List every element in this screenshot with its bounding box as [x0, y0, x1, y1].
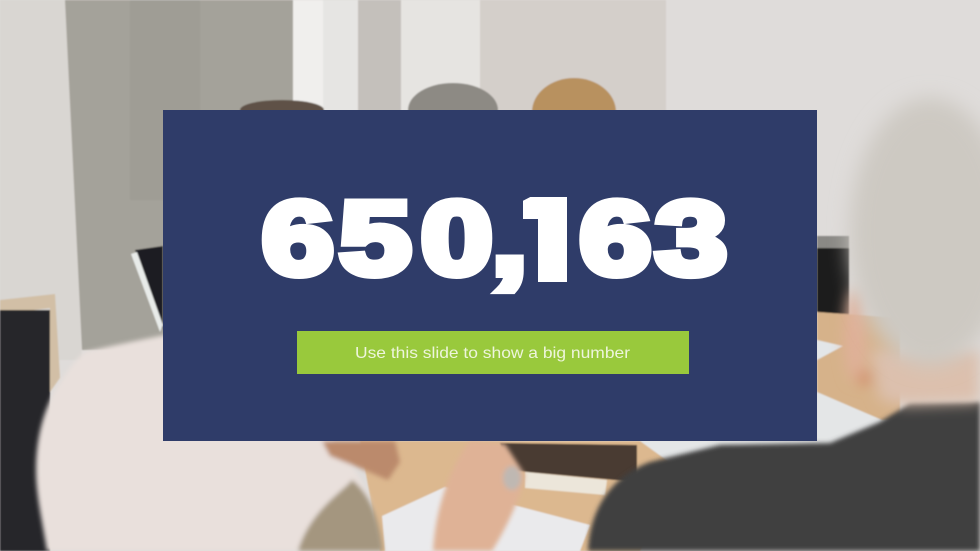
big number: 63: [580, 180, 727, 296]
big number: [262, 180, 728, 296]
big number: 650,: [262, 180, 527, 296]
caption text: Use this slide to show a big number: [355, 345, 631, 362]
green caption bar: [297, 331, 689, 374]
big number: 1: [509, 176, 585, 299]
navy panel: [163, 110, 817, 441]
